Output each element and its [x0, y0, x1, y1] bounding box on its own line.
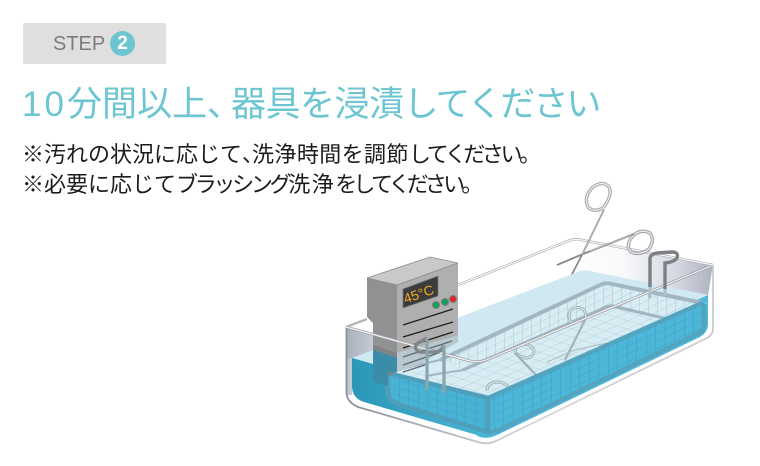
water surface: [352, 270, 708, 397]
tank back walls: [346, 239, 713, 443]
water front short face: [352, 358, 487, 438]
tank outline and front rim: [346, 265, 713, 443]
temperature controller: [367, 257, 458, 386]
rear tank hook: [650, 252, 677, 298]
vent lines: [403, 309, 453, 348]
basket front wall: [388, 304, 704, 432]
front tank hook: [415, 338, 444, 393]
water: [352, 270, 708, 438]
title: 10分間以上、器具を浸漬してください: [22, 85, 599, 124]
scissors under water: [487, 308, 607, 391]
controller front face: [397, 263, 458, 353]
water front long face: [477, 295, 708, 438]
step badge: [23, 23, 166, 64]
display: [403, 276, 438, 308]
controller top face: [367, 257, 458, 285]
temperature reading: 45°C: [402, 282, 436, 306]
step label: STEP: [53, 33, 105, 55]
controller left face: [367, 278, 397, 353]
step number: 2: [117, 33, 128, 54]
basket floor and back frame: [388, 283, 707, 397]
controller underwater reflection: [373, 334, 458, 386]
scissors above water: [557, 184, 652, 278]
step number: [110, 31, 135, 56]
indicator lights: [433, 296, 456, 308]
note: brushing: ※必要に応じてブラッシング洗浄をしてください。: [22, 172, 480, 197]
note: wash time: ※汚れの状況に応じて、洗浄時間を調節してください。: [22, 142, 538, 167]
